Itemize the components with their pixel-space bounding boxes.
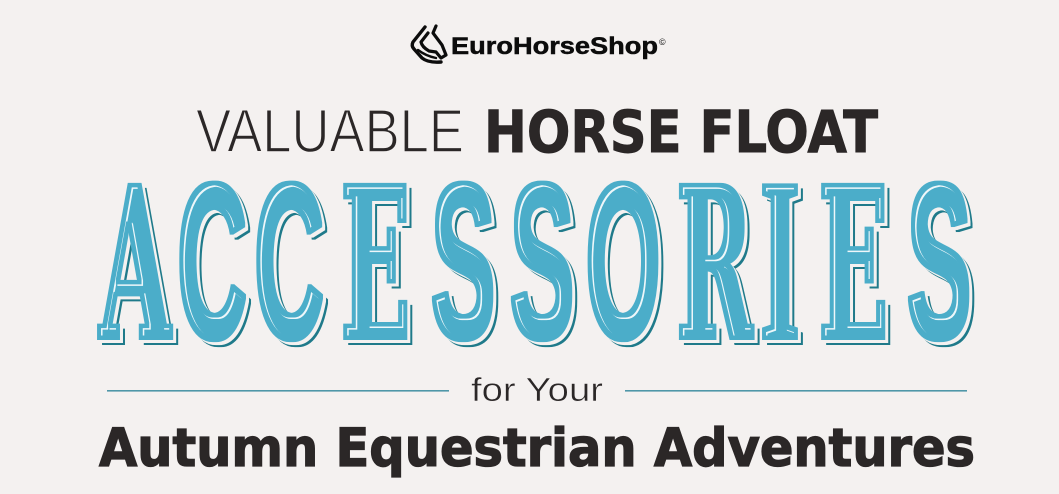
decorative heading: ACCESSORIES: I (760, 131, 800, 389)
decorative heading: ACCESSORIES: CC (177, 137, 324, 386)
subtitle text: for Your (471, 371, 603, 408)
decorative heading: ACCESSORIES: SSO (431, 137, 661, 386)
decorative heading: ACCESSORIES (98, 131, 972, 389)
left rule (107, 390, 449, 392)
decorative heading: ACCESSORIES: A (98, 142, 172, 389)
logo wordmark: EuroHorseShop (451, 33, 658, 60)
decorative heading: ACCESSORIES: E (818, 142, 888, 389)
right rule (625, 390, 967, 392)
bottom headline: Autumn Equestrian Adventures (99, 418, 975, 479)
title line: VALUABLE HORSE FLOAT (196, 97, 878, 166)
decorative heading: ACCESSORIES: E (340, 142, 411, 389)
icon: horse head (412, 26, 446, 62)
logo copyright mark: © (659, 37, 666, 47)
title bold words: HORSE FLOAT (484, 98, 878, 166)
decorative heading: ACCESSORIES: R (676, 142, 753, 389)
title light word: VALUABLE (196, 97, 464, 165)
logo: EuroHorseShop (412, 26, 666, 62)
decorative heading: ACCESSORIES: S (907, 137, 972, 386)
